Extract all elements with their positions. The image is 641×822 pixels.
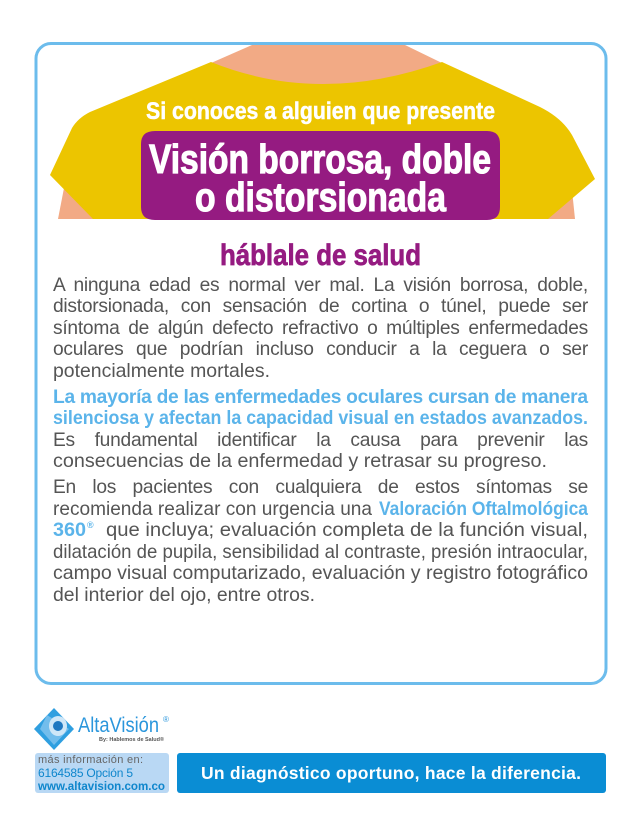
- contact information box: www.altavision.com.co: [37, 779, 165, 793]
- paragraph 2: La mayoría de las enfermedades oculares cursan de manera: [53, 387, 588, 408]
- contact information box: [35, 753, 169, 793]
- paragraph 1: oculares que podrían incluso conducir a la ceguera o ser: [53, 339, 588, 360]
- paragraph 2: consecuencias de la enfermedad y retrasar su progreso.: [53, 451, 547, 472]
- paragraph 1: potencialmente mortales.: [53, 361, 270, 382]
- panel frame: [36, 44, 606, 684]
- purple title box: [141, 131, 500, 220]
- purple title box: Visión borrosa, doble: [149, 136, 491, 182]
- subtitle: Si conoces a alguien que presente: [146, 98, 495, 125]
- paragraph 2: Es fundamental identificar la causa para prevenir las: [53, 430, 588, 451]
- paragraph 3: Valoración Oftalmológica: [379, 499, 588, 520]
- illustration: person in yellow shirt: [50, 45, 595, 219]
- paragraph 2: silenciosa y afectan la capacidad visual en estados avanzados.: [53, 408, 588, 429]
- paragraph 3: dilatación de pupila, sensibilidad al contraste, presión intraocular,: [53, 542, 588, 563]
- purple title box: o distorsionada: [195, 174, 447, 220]
- paragraph 2: [53, 387, 588, 472]
- paragraph 3: campo visual computarizado, evaluación y registro fotográfico: [53, 563, 588, 584]
- paragraph 3: 360: [53, 520, 86, 541]
- paragraph 3: En los pacientes con cualquiera de estos síntomas se: [53, 477, 588, 498]
- paragraph 1: síntoma de algún defecto refractivo o múltiples enfermedades: [53, 318, 588, 339]
- paragraph 3: del interior del ojo, entre otros.: [53, 585, 315, 606]
- logo wordmark: ®: [163, 715, 169, 724]
- paragraph 3: recomienda realizar con urgencia una: [53, 499, 372, 520]
- slogan banner: Un diagnóstico oportuno, hace la diferencia.: [201, 763, 581, 783]
- logo wordmark: By: Hablemos de Salud®: [99, 736, 164, 743]
- paragraph 3: ®: [87, 520, 94, 530]
- logo icon: eye in diamond: [34, 708, 74, 750]
- logo wordmark: AltaVisión: [78, 714, 159, 737]
- paragraph 3: [53, 477, 588, 606]
- slogan banner: [177, 753, 606, 793]
- paragraph 3: que incluya; evaluación completa de la función visual,: [106, 520, 588, 541]
- paragraph 1: distorsionada, con sensación de cortina o túnel, puede ser: [53, 296, 588, 317]
- paragraph 1: [53, 275, 588, 382]
- contact information box: más información en:: [38, 754, 143, 766]
- paragraph 1: A ninguna edad es normal ver mal. La visión borrosa, doble,: [53, 275, 588, 296]
- heading: háblale de salud: [220, 239, 421, 272]
- contact information box: 6164585 Opción 5: [38, 766, 133, 780]
